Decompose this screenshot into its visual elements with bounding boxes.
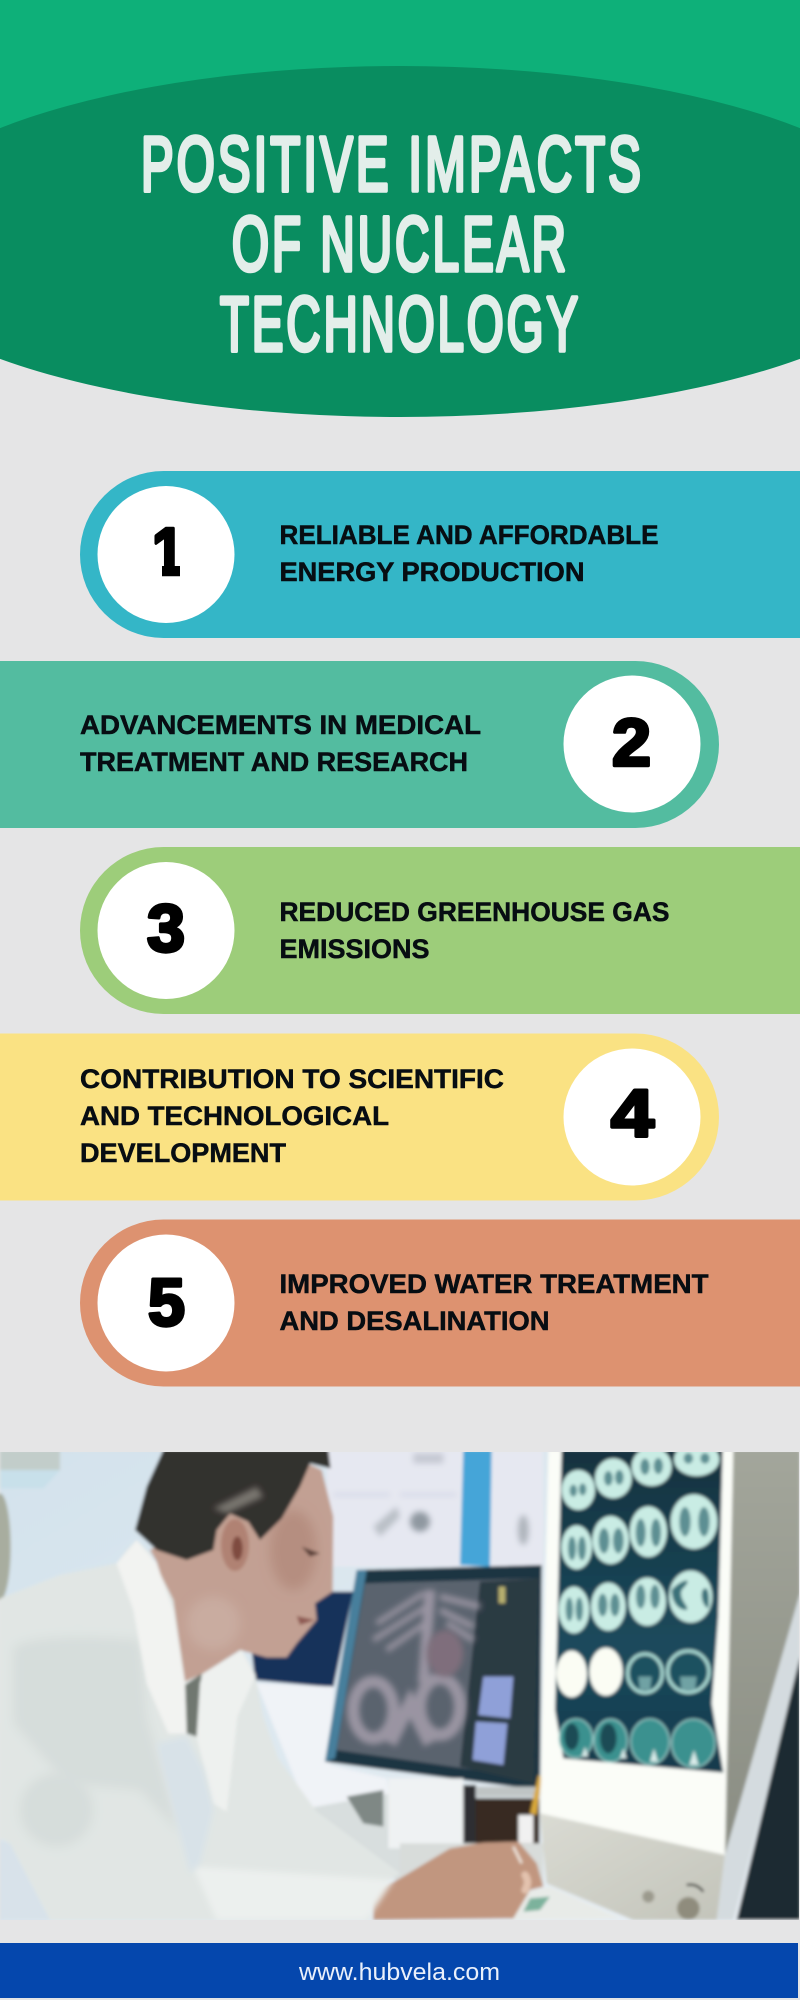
- number 5: 5: [148, 1266, 185, 1340]
- panel: item 3: [80, 847, 800, 1014]
- lightbox base: [540, 1813, 725, 1920]
- number 2: 2: [612, 706, 651, 780]
- label 3: [280, 897, 670, 964]
- footer url: www.hubvela.com: [298, 1959, 500, 1986]
- number circle 4: [564, 1048, 700, 1186]
- lab coat: [0, 1540, 400, 1920]
- skeleton on monitor: [353, 1590, 480, 1743]
- hand: [373, 1842, 543, 1920]
- label 4: AND TECHNOLOGICAL: [80, 1101, 389, 1131]
- header ellipse: [0, 66, 800, 417]
- photo: doctor reviewing CT scans: [0, 1443, 800, 1925]
- band 3: [80, 847, 800, 1014]
- label 5: IMPROVED WATER TREATMENT: [280, 1269, 709, 1299]
- undershirt: [185, 1673, 202, 1737]
- label 5: [280, 1269, 709, 1336]
- number 3: 3: [147, 892, 185, 966]
- number 1: 1: [152, 514, 184, 590]
- label 2: TREATMENT AND RESEARCH: [80, 747, 468, 777]
- lightbox: [540, 1450, 733, 1855]
- casing edge and dark corner: [717, 1593, 800, 1920]
- number 4: 4: [611, 1076, 654, 1152]
- wall background: [0, 1450, 800, 1925]
- title: TECHNOLOGY: [220, 282, 581, 368]
- title: OF NUCLEAR: [232, 202, 569, 288]
- label 5: AND DESALINATION: [280, 1306, 550, 1336]
- coat collar: [117, 1540, 187, 1733]
- desk left corner: [0, 1840, 50, 1920]
- monitor: [325, 1565, 542, 1790]
- footer bar: [0, 1943, 798, 1998]
- label 4: [80, 1064, 504, 1168]
- panel: item 5: [80, 1220, 800, 1386]
- keyboard: [515, 1889, 611, 1918]
- monitor blue patches: [478, 1677, 513, 1718]
- film sheet: [555, 1450, 723, 1773]
- label 2: [80, 710, 481, 777]
- number circle 2: [564, 676, 700, 812]
- label 2: ADVANCEMENTS IN MEDICAL: [80, 710, 481, 740]
- hair: [135, 1450, 331, 1560]
- label 3: REDUCED GREENHOUSE GAS: [280, 897, 670, 927]
- number circle 5: [98, 1234, 234, 1372]
- band 1: [80, 471, 800, 638]
- desk behind: [257, 1683, 390, 1808]
- ear: [221, 1519, 249, 1571]
- band 2: [0, 661, 719, 828]
- label 1: [280, 520, 658, 587]
- panel: item 2: [0, 661, 719, 828]
- header top band: [0, 0, 800, 131]
- man's head: [150, 1460, 333, 1682]
- dark area behind face: [252, 1592, 353, 1687]
- header: [0, 0, 800, 417]
- monitor stand, box and clutter: [388, 1778, 463, 1848]
- label 1: ENERGY PRODUCTION: [280, 557, 584, 587]
- title: [141, 122, 644, 368]
- number circle 1: [98, 486, 234, 623]
- number circle 3: [98, 862, 234, 999]
- band 5: [80, 1220, 800, 1386]
- CT scan rows: [559, 1443, 719, 1633]
- label 4: DEVELOPMENT: [80, 1138, 286, 1168]
- side casing: [725, 1450, 800, 1855]
- label 4: CONTRIBUTION TO SCIENTIFIC: [80, 1064, 504, 1094]
- band 4: [0, 1034, 719, 1200]
- label 3: EMISSIONS: [280, 934, 430, 964]
- label 1: RELIABLE AND AFFORDABLE: [280, 520, 658, 550]
- panel: item 1: [80, 471, 800, 638]
- panel: item 4: [0, 1034, 719, 1200]
